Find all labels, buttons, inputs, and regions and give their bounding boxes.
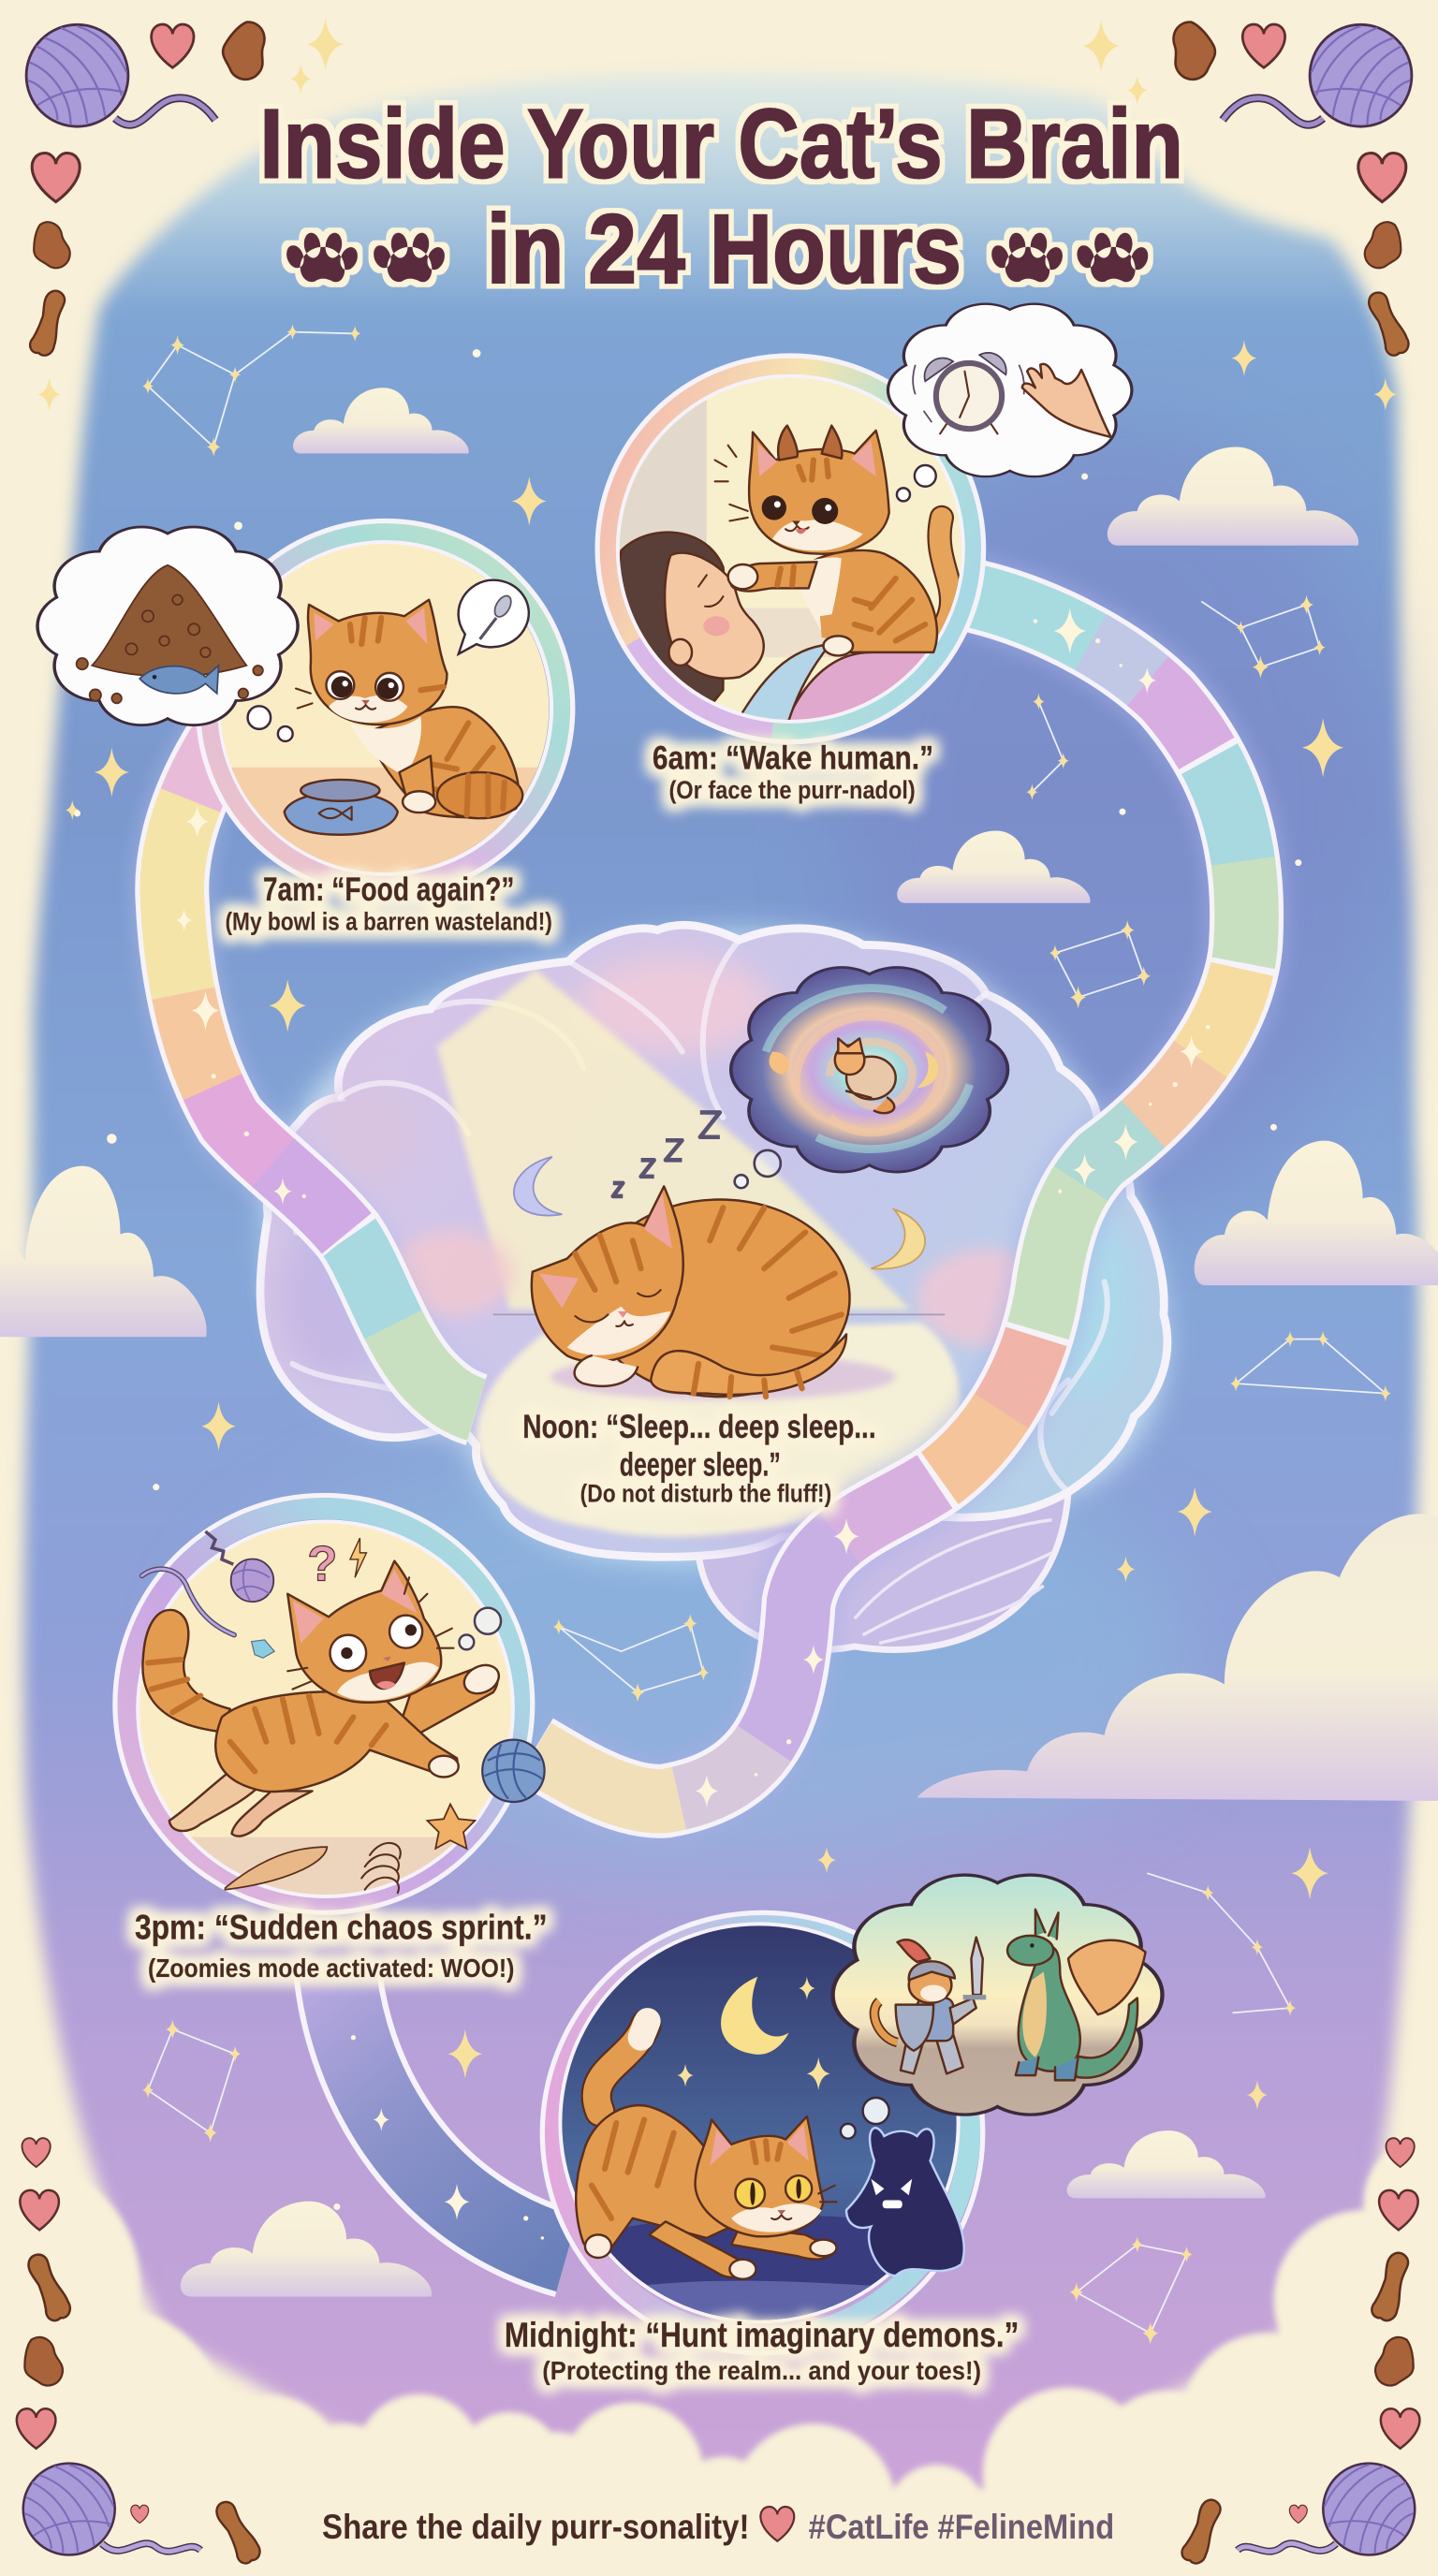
noon caption: (Do not disturb the fluff!) xyxy=(580,1478,831,1507)
scene xyxy=(213,542,559,883)
ribbon colour segments xyxy=(535,593,1247,1801)
6am caption xyxy=(653,740,933,804)
hungry cat xyxy=(296,600,522,818)
scene xyxy=(131,1520,526,1903)
pathway ribbon from 6am through the brain to 3pm xyxy=(535,593,1247,1808)
icon: feather toy xyxy=(225,1847,327,1890)
icon: yarn bottom left xyxy=(23,2464,200,2555)
sleeping zzz xyxy=(613,1112,720,1196)
cloud: left side xyxy=(0,1166,207,1337)
ribbon sparkles xyxy=(696,608,1211,1808)
ribbon separators xyxy=(535,593,1247,1801)
icon: lightning xyxy=(350,1538,366,1577)
footer: #CatLife #FelineMind xyxy=(809,2508,1114,2546)
7am caption xyxy=(225,871,552,936)
pink cloud left xyxy=(389,1231,514,1316)
icon: hand xyxy=(1022,364,1111,437)
title: in 24 Hours xyxy=(487,195,961,304)
cloud: lower left xyxy=(181,2202,432,2297)
ring edges xyxy=(542,1912,983,2353)
constellation 1 xyxy=(142,324,360,457)
3pm caption: (Zoomies mode activated: WOO!) xyxy=(148,1954,514,1983)
footer xyxy=(322,2507,1114,2546)
icon: paw prints xyxy=(286,233,1148,282)
ring xyxy=(127,1508,521,1903)
constellations xyxy=(142,324,1391,2345)
3pm caption: 3pm: “Sudden chaos sprint.” xyxy=(135,1908,548,1946)
shadow demon xyxy=(846,2128,964,2276)
ring edges xyxy=(198,520,573,896)
hunting cat xyxy=(576,2021,837,2279)
midnight caption xyxy=(505,2316,1019,2385)
footer: Share the daily purr-sonality! xyxy=(322,2508,749,2546)
cerebellum xyxy=(697,1492,1068,1650)
constellation 8 xyxy=(142,2019,241,2143)
icon: yarn top right xyxy=(1223,24,1412,126)
ring edges xyxy=(597,356,984,742)
cloud: middle xyxy=(897,831,1091,903)
icon: blue confetti xyxy=(252,1640,274,1658)
7am caption: 7am: “Food again?” xyxy=(263,871,514,908)
noon caption: deeper sleep.” xyxy=(620,1446,781,1483)
tiny galaxy cat xyxy=(835,1038,896,1113)
panel: 3pm chaos sprint xyxy=(115,1495,545,1912)
cloud: right side xyxy=(1195,1141,1438,1285)
ring xyxy=(210,533,561,884)
wake-up cat xyxy=(715,426,937,655)
thought bubbles xyxy=(735,1150,781,1188)
icon: fish xyxy=(139,666,218,694)
cream text pad xyxy=(477,1323,960,1537)
knight and dragon thought bubble xyxy=(835,1877,1160,2139)
icon: purple yarn and string xyxy=(142,1531,273,1635)
ring xyxy=(609,366,973,731)
brain glow xyxy=(267,932,1165,1561)
title: Inside Your Cat’s Brain xyxy=(259,90,1183,199)
galaxy dream bubble xyxy=(733,969,1006,1171)
7am caption: (My bowl is a barren wasteland!) xyxy=(225,907,552,936)
ring lower left tint xyxy=(635,641,772,729)
midnight caption: (Protecting the realm... and your toes!) xyxy=(542,2356,981,2385)
kibble pile xyxy=(77,565,263,703)
constellation 9 xyxy=(1069,2236,1193,2345)
horizon line xyxy=(493,1313,945,1315)
icon: spring toy xyxy=(361,1843,401,1893)
brain colour washes xyxy=(279,957,1134,1543)
constellation 5 xyxy=(1230,1331,1391,1401)
constellation 3 xyxy=(1026,694,1069,800)
noon caption xyxy=(522,1409,876,1507)
cloud: upper right xyxy=(1108,446,1358,546)
noon cat curled asleep xyxy=(532,1186,896,1400)
food thought bubble xyxy=(39,528,296,741)
icon: star toy xyxy=(427,1804,475,1849)
midnight caption: Midnight: “Hunt imaginary demons.” xyxy=(505,2316,1019,2354)
cloud: upper left xyxy=(293,388,469,454)
ring edges xyxy=(115,1495,533,1912)
knight cat xyxy=(874,1938,986,2073)
scene xyxy=(562,1925,957,2320)
panel: 7am food again xyxy=(39,520,573,896)
pathway ribbon from 7am into the brain xyxy=(172,715,477,1410)
6am caption: 6am: “Wake human.” xyxy=(653,740,933,777)
dragon xyxy=(1007,1910,1146,2080)
background: light blue tint xyxy=(213,1446,1199,1873)
night stars xyxy=(677,1977,829,2090)
thought bubbles xyxy=(459,1608,501,1649)
pink cloud right xyxy=(917,1249,1055,1347)
zoomies cat xyxy=(142,1561,504,1837)
3pm caption xyxy=(135,1908,548,1983)
ring xyxy=(552,1921,970,2338)
alarm thought bubble xyxy=(889,305,1130,501)
cream cloud frame at the bottom xyxy=(0,2136,1438,2576)
icon: alarm clock xyxy=(913,353,1024,433)
cloud: large lower right xyxy=(917,1514,1438,1801)
icon: yarn bottom right xyxy=(1238,2464,1415,2555)
icon: blue yarn xyxy=(482,1740,545,1802)
cloud: lower right small xyxy=(1067,2130,1266,2198)
light beam xyxy=(437,970,911,1310)
scene xyxy=(620,378,961,720)
brain folds xyxy=(292,940,1108,1492)
icon: footer heart xyxy=(760,2507,794,2541)
constellation 2 xyxy=(1201,594,1326,679)
panel: cartoon brain xyxy=(260,925,1167,1650)
panel: midnight demon hunt xyxy=(542,1877,1160,2353)
brain body xyxy=(260,925,1167,1557)
background: periwinkle tint xyxy=(838,427,1397,1216)
crescent moon yellow xyxy=(871,1209,925,1269)
6am caption: (Or face the purr-nadol) xyxy=(668,775,916,804)
icon: yarn top left xyxy=(26,24,215,126)
icon: question mark: ? xyxy=(307,1537,337,1592)
constellation 4 xyxy=(1049,920,1151,1009)
food bowl xyxy=(285,780,398,835)
sky clouds xyxy=(0,388,1438,2297)
title xyxy=(259,90,1183,304)
panel: 6am wake human xyxy=(597,305,1130,742)
icon: crescent moon xyxy=(721,1977,789,2055)
constellation 7 xyxy=(1147,1873,1296,2016)
crescent moon blue xyxy=(514,1157,562,1216)
noon caption: Noon: “Sleep... deep sleep... xyxy=(522,1409,876,1445)
speech bubble with spoon xyxy=(459,580,529,654)
constellation 6 xyxy=(553,1614,709,1703)
pathway ribbon from 3pm to midnight xyxy=(337,1964,567,2254)
